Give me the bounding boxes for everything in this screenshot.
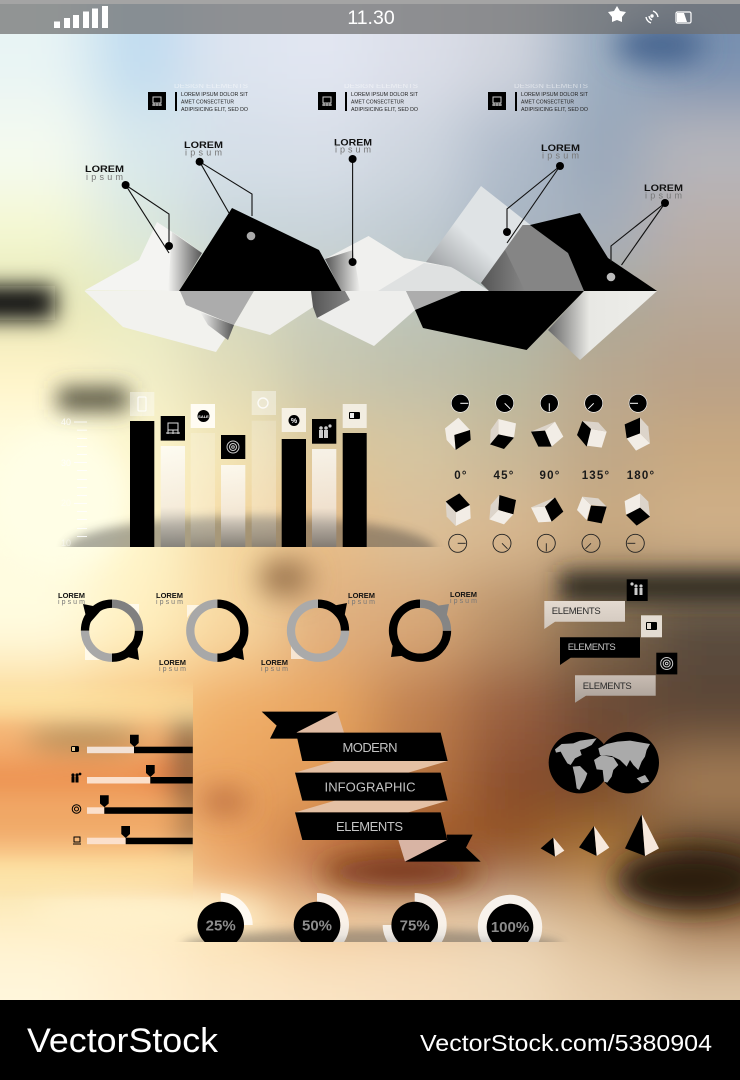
marker dots: [122, 155, 669, 281]
speech tag 1: ELEMENTS: [552, 606, 601, 617]
floor shadow under bar chart: [60, 510, 439, 547]
mountain label 4: ipsum: [542, 150, 579, 160]
degree labels: 0°: [454, 470, 468, 482]
donut ring 3: [291, 603, 347, 659]
lower cubes row: [446, 493, 650, 526]
progress sliders: [71, 735, 193, 844]
speech tag 2: ELEMENTS: [568, 642, 616, 653]
battery icon: [676, 12, 691, 23]
star icon: [608, 6, 626, 22]
upper mountain peaks: [84, 186, 657, 291]
gauge 75 percent: [382, 893, 447, 942]
small pyramid: [541, 837, 564, 857]
header info block 2: LOREM IPSUM DOLOR SIT: [351, 92, 419, 98]
speech tag 3: [575, 653, 677, 703]
ribbon text: MODERN: [342, 740, 398, 755]
slider row 1: [71, 735, 193, 753]
footer watermark band: [0, 1000, 740, 1080]
medium pyramid: [579, 826, 609, 856]
header info block 3: ADIPISICING ELIT, SED DO: [521, 107, 588, 113]
wifi icon: [646, 11, 658, 23]
mountain label 1: LOREM: [85, 164, 124, 175]
donut label 3: [159, 660, 186, 673]
mountain label 1: [85, 164, 124, 182]
donut label 1: LOREM: [58, 593, 85, 600]
header info block 2: DESIGN ELEMENTS: [344, 84, 418, 90]
bar 8 with battery icon: [343, 404, 367, 547]
floor shadow under percent gauges: [180, 923, 564, 942]
left slider background panel: [0, 688, 193, 882]
large pyramid: [625, 814, 659, 856]
bar chart axis: [61, 417, 87, 548]
polygon mountain chart: [84, 155, 669, 360]
bar 5 with pie icon: [252, 391, 276, 547]
bar 2 with laptop icon: [161, 416, 185, 547]
ribbon title banner: [262, 712, 481, 862]
ribbon text: [324, 740, 416, 834]
donut label 6: ipsum: [450, 598, 477, 605]
mountain label 2: [184, 140, 223, 158]
donut label 5: LOREM: [261, 660, 288, 667]
donut label 6: [450, 592, 477, 605]
bar chart axis: 20: [61, 498, 71, 508]
bar chart axis: 40: [61, 417, 71, 427]
header info block 1: LOREM IPSUM DOLOR SIT: [181, 92, 249, 98]
gauge 50 percent: [294, 893, 349, 942]
gauge 100 percent: [482, 899, 538, 955]
donut label 2: LOREM: [156, 593, 183, 600]
ribbon folds: [295, 761, 448, 812]
donut label 2: [156, 593, 183, 606]
donut label 1: [58, 593, 85, 606]
bar chart axis: 10: [61, 538, 71, 548]
mountain label 1: ipsum: [86, 172, 123, 182]
speech tag 3: ELEMENTS: [583, 681, 632, 692]
degree labels: 45°: [494, 470, 514, 482]
footer logo: VectorStock: [27, 1022, 219, 1060]
rotation cubes panel: [445, 394, 655, 552]
degree labels: 135°: [582, 470, 610, 482]
donut label 3: LOREM: [159, 660, 186, 667]
bar 1 with phone icon: [130, 392, 154, 547]
header info block 1: ADIPISICING ELIT, SED DO: [181, 107, 248, 113]
slider row 3: [72, 795, 193, 814]
header info block 1: DESIGN ELEMENTS: [174, 84, 248, 90]
header info block 2: AMET CONSECTETUR: [351, 100, 404, 106]
donut label 6: LOREM: [450, 592, 477, 599]
speech tag 1: [544, 579, 648, 629]
bar 4 with target icon: [221, 435, 245, 547]
connector lines: [126, 159, 665, 265]
filled clock dials: [451, 394, 647, 412]
ribbon band 3: [295, 812, 447, 840]
ribbon bottom tail: [398, 835, 481, 862]
donut label 2: ipsum: [156, 599, 183, 606]
ribbon text: ELEMENTS: [336, 819, 403, 834]
header info block 3: LOREM IPSUM DOLOR SIT: [521, 92, 589, 98]
mountain label 3: LOREM: [334, 138, 372, 148]
mountain label 5: ipsum: [645, 190, 682, 200]
status bar: [0, 0, 740, 34]
outlined clock dials: [449, 534, 644, 552]
donut ring 4: [391, 604, 449, 658]
world map globes: [549, 732, 659, 793]
donut ring 2: [187, 604, 244, 660]
donut label 3: ipsum: [159, 666, 186, 673]
donut label 1: ipsum: [58, 599, 85, 606]
donut label 5: [261, 660, 288, 673]
percent gauges: [197, 893, 542, 942]
footer url: VectorStock.com/5380904: [420, 1030, 712, 1056]
ribbon text: INFOGRAPHIC: [324, 780, 416, 794]
speech tag 2: [560, 615, 662, 665]
ribbon band 1: [296, 733, 448, 761]
degree labels: [454, 470, 655, 482]
gauge 25 percent: [197, 893, 253, 942]
bar 7 with people icon: [312, 419, 336, 547]
upper cubes row: [445, 418, 650, 451]
ribbon top tail: [262, 712, 344, 739]
mountain label 3: ipsum: [335, 144, 371, 154]
donut label 4: LOREM: [348, 593, 375, 600]
slider row 4: [73, 826, 193, 844]
bar 6 with percent icon: [282, 408, 306, 547]
donut ring 1: [83, 604, 139, 660]
mountain label 4: [541, 143, 580, 160]
mountain label 3: [334, 138, 372, 154]
header info block 3: DESIGN ELEMENTS: [514, 84, 588, 90]
mountain label 5: [644, 183, 683, 200]
gauge 50 percent: 50%: [302, 918, 332, 934]
bar 3 with sale icon: SALE: [198, 414, 209, 419]
gauge 75 percent: 75%: [400, 918, 430, 934]
mountain label 5: LOREM: [644, 183, 683, 194]
degree labels: 180°: [627, 470, 655, 482]
mirrored lower facets: [84, 291, 657, 360]
header info block 2: ADIPISICING ELIT, SED DO: [351, 107, 418, 113]
degree labels: 90°: [540, 470, 560, 482]
bar chart: [130, 391, 367, 547]
gauge 100 percent: 100%: [491, 919, 529, 936]
pyramids: [541, 814, 659, 857]
donut label 4: ipsum: [348, 599, 375, 606]
header info block 3: AMET CONSECTETUR: [521, 100, 574, 106]
gauge 25 percent: 25%: [206, 918, 236, 934]
bar chart axis: 30: [61, 458, 71, 468]
mountain label 4: LOREM: [541, 143, 580, 154]
donut label 5: ipsum: [261, 666, 288, 673]
mountain label 2: LOREM: [184, 140, 223, 151]
signal strength icon: [54, 6, 108, 28]
header info block 2: [318, 84, 419, 113]
mountain label 2: ipsum: [185, 148, 222, 158]
clock time: 11.30: [347, 7, 395, 29]
ribbon band 2: [295, 773, 448, 801]
header info block 3: [488, 84, 589, 113]
header info block 1: [148, 84, 249, 113]
header info block 1: AMET CONSECTETUR: [181, 100, 234, 106]
slider row 2: [71, 765, 193, 784]
bar 6 with percent icon: %: [291, 418, 298, 425]
bar 3 with sale icon: [191, 404, 215, 547]
donut label 4: [348, 593, 375, 606]
